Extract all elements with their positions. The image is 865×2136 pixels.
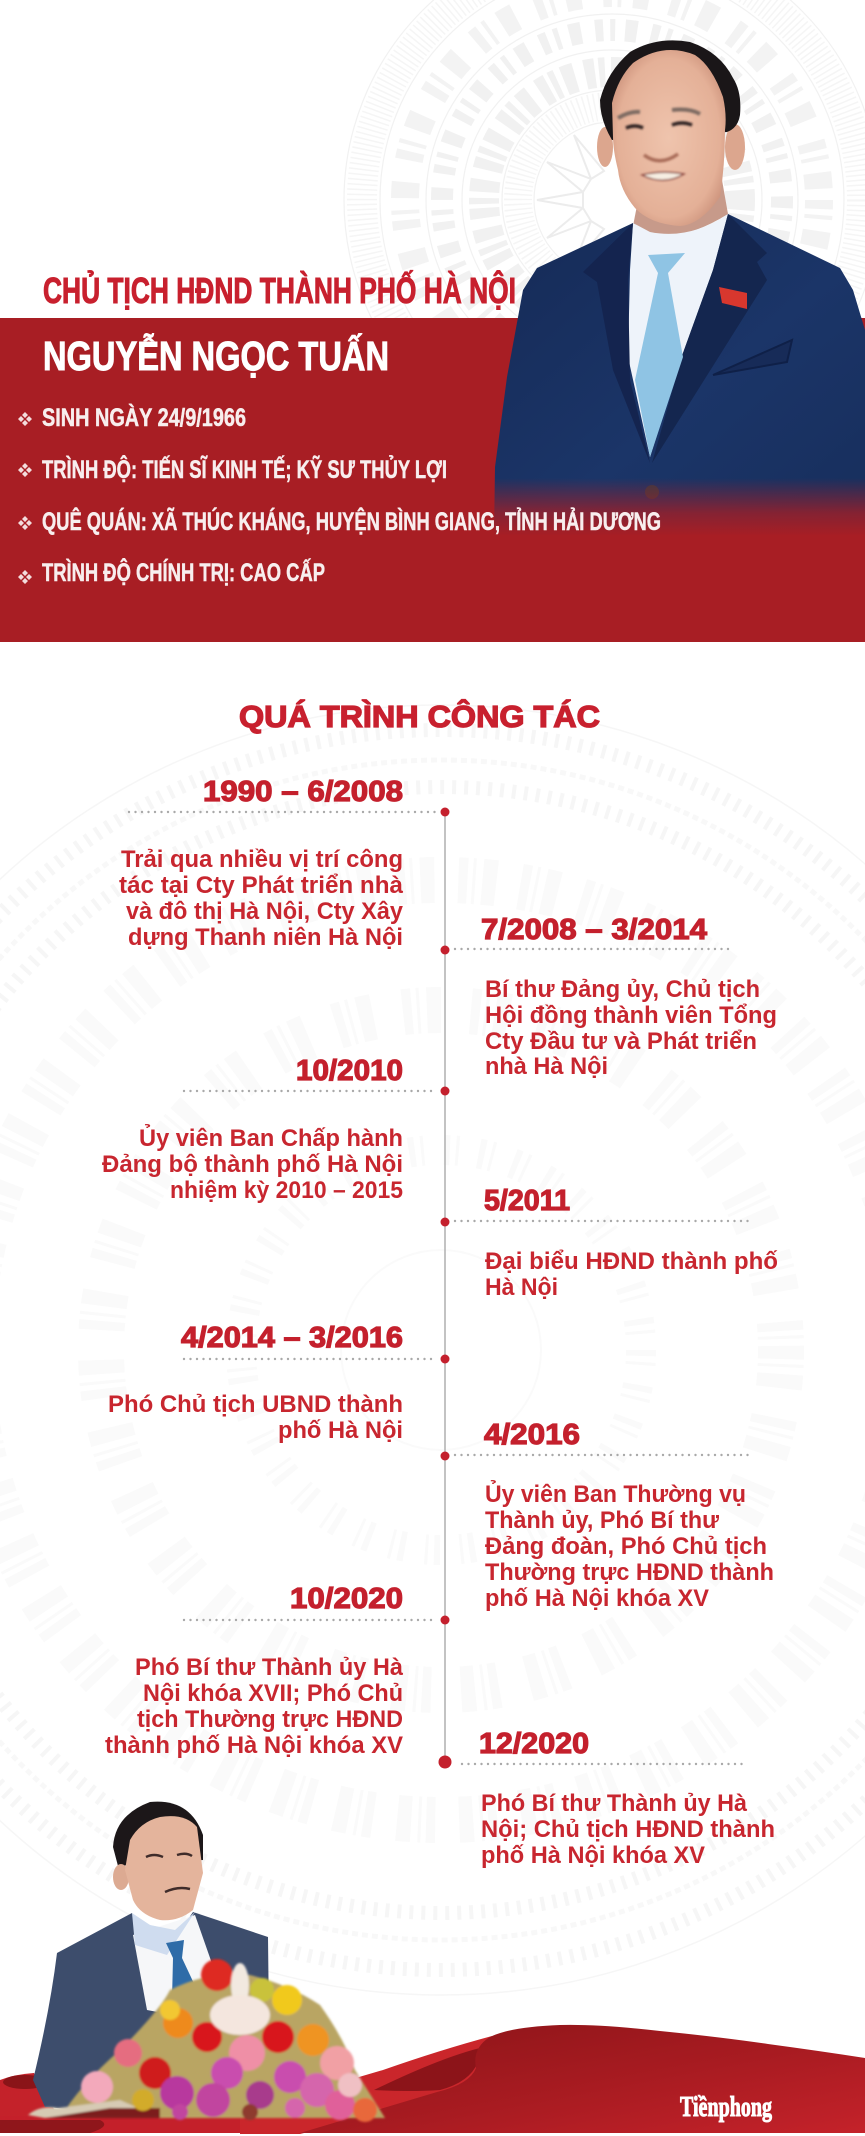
left lapel (583, 223, 650, 463)
footer red ribbon (0, 2025, 865, 2134)
background: large faint drum pattern behind timeline (0, 705, 865, 1995)
timeline item: 10/2010: nhiệm kỳ 2010 – 2015 (170, 1177, 403, 1204)
timeline item: 5/2011: Đại biểu HĐND thành phố (485, 1248, 778, 1275)
education: TRÌNH ĐỘ: TIẾN SĨ KINH TẾ; KỸ SƯ THỦY LỢI (42, 454, 447, 484)
collar (132, 1912, 195, 1955)
bottom-left shadow (0, 2120, 104, 2133)
timeline item: 1990 – 6/2008: 1990 – 6/2008 (203, 776, 403, 808)
timeline item: 10/2020: thành phố Hà Nội khóa XV (105, 1732, 403, 1759)
bright wedge (240, 2036, 492, 2134)
timeline item: 10/2020 (105, 1583, 450, 1759)
timeline item: 10/2010: 10/2010 (296, 1055, 403, 1087)
tie (166, 1940, 197, 2000)
portrait: main figure (490, 40, 865, 536)
logo: Tiền Phong: Tiềnphong (680, 2092, 772, 2123)
timeline item: 10/2020: Phó Bí thư Thành ủy Hà (135, 1654, 404, 1681)
timeline item: 12/2020: 12/2020 (479, 1728, 589, 1760)
bullet 2 (18, 463, 32, 477)
timeline item: 1990 – 6/2008: Trải qua nhiều vị trí công (121, 846, 403, 873)
timeline item: 1990 – 6/2008: và đô thị Hà Nội, Cty Xây (126, 898, 404, 925)
name: NGUYỄN NGỌC TUẤN (43, 333, 389, 379)
lapel pin (719, 287, 747, 309)
timeline item: 4/2016: Ủy viên Ban Thường vụ (485, 1479, 746, 1508)
timeline item: 10/2020: 10/2020 (290, 1583, 403, 1615)
timeline item: 4/2014 – 3/2016 (108, 1322, 450, 1444)
bullet 1 (18, 412, 32, 426)
title: CHỦ TỊCH HĐND THÀNH PHỐ HÀ NỘI (43, 269, 516, 311)
timeline item: 10/2010: Đảng bộ thành phố Hà Nội (102, 1151, 403, 1178)
pocket (713, 340, 792, 375)
hair (113, 1802, 203, 1866)
political level: TRÌNH ĐỘ CHÍNH TRỊ: CAO CẤP (42, 557, 325, 587)
timeline item: 7/2008 – 3/2014: Cty Đầu tư và Phát triển (485, 1028, 757, 1055)
flower bouquet (28, 1959, 385, 2122)
timeline item: 7/2008 – 3/2014 (440, 914, 777, 1080)
timeline item: 7/2008 – 3/2014: Bí thư Đảng ủy, Chủ tịch (485, 976, 760, 1003)
timeline item: 7/2008 – 3/2014: Hội đồng thành viên Tổng (485, 1002, 777, 1029)
section heading: QUÁ TRÌNH CÔNG TÁC (239, 698, 600, 734)
facial features (146, 1854, 192, 1892)
timeline item: 1990 – 6/2008: tác tại Cty Phát triển nhà (119, 872, 404, 899)
timeline item: 12/2020: phố Hà Nội khóa XV (481, 1842, 705, 1869)
timeline item: 4/2016: phố Hà Nội khóa XV (485, 1585, 709, 1612)
right lapel (652, 214, 767, 463)
timeline item: 4/2016 (440, 1419, 774, 1612)
red header band (0, 318, 865, 642)
ear (113, 1864, 129, 1890)
timeline item: 1990 – 6/2008 (119, 776, 450, 951)
timeline item: 4/2014 – 3/2016: 4/2014 – 3/2016 (181, 1322, 403, 1354)
timeline item: 10/2010: Ủy viên Ban Chấp hành (139, 1123, 403, 1152)
birth date: SINH NGÀY 24/9/1966 (42, 403, 246, 432)
hometown: QUÊ QUÁN: XÃ THÚC KHÁNG, HUYỆN BÌNH GIANG, TỈNH HẢI DƯƠNG (42, 506, 661, 536)
facial features (618, 110, 700, 180)
timeline item: 4/2016: Đảng đoàn, Phó Chủ tịch (485, 1533, 767, 1560)
timeline item: 7/2008 – 3/2014: nhà Hà Nội (485, 1053, 608, 1080)
timeline item: 12/2020: Nội; Chủ tịch HĐND thành (481, 1816, 775, 1843)
timeline item: 5/2011: Hà Nội (485, 1274, 558, 1301)
timeline item: 7/2008 – 3/2014: 7/2008 – 3/2014 (481, 914, 707, 946)
shirt (628, 214, 728, 457)
timeline item: 4/2014 – 3/2016: Phó Chủ tịch UBND thành (108, 1391, 403, 1418)
timeline item: 4/2016: Thành ủy, Phó Bí thư (485, 1507, 720, 1534)
left fold shadow (3, 2075, 47, 2089)
neck (633, 180, 728, 236)
timeline item: 1990 – 6/2008: dựng Thanh niên Hà Nội (128, 924, 403, 951)
bottom strip (0, 2116, 420, 2133)
bio list (18, 403, 661, 587)
suit (494, 214, 865, 535)
timeline item: 10/2020: Nội khóa XVII; Phó Chủ (143, 1680, 403, 1707)
background: bronze drum pattern at top (344, 0, 865, 468)
suit (33, 1912, 270, 2112)
tie (635, 253, 685, 457)
shirt (133, 1915, 216, 2020)
ears (597, 127, 613, 167)
bullet 3 (18, 516, 32, 530)
timeline item: 10/2010 (102, 1055, 450, 1204)
timeline item: 5/2011 (440, 1185, 778, 1301)
timeline item: 4/2016: Thường trực HĐND thành (485, 1559, 774, 1586)
timeline item: 10/2020: tịch Thường trực HĐND (137, 1706, 403, 1733)
timeline item: 4/2014 – 3/2016: phố Hà Nội (278, 1417, 403, 1444)
curl shadow (374, 2048, 480, 2091)
timeline item: 12/2020 (438, 1728, 775, 1869)
left ribbon end (0, 2073, 60, 2120)
fade into band (490, 478, 865, 536)
main ribbon (300, 2025, 865, 2133)
timeline item: 12/2020: Phó Bí thư Thành ủy Hà (481, 1790, 748, 1817)
face (125, 1816, 203, 1920)
portrait: figure at lectern with flowers (28, 1802, 385, 2122)
hair (600, 40, 740, 140)
timeline item: 5/2011: 5/2011 (484, 1185, 570, 1217)
timeline axis (444, 812, 446, 1762)
timeline item: 4/2016: 4/2016 (484, 1419, 580, 1451)
button (645, 485, 659, 499)
face (612, 50, 726, 226)
bullet 4 (18, 570, 32, 584)
